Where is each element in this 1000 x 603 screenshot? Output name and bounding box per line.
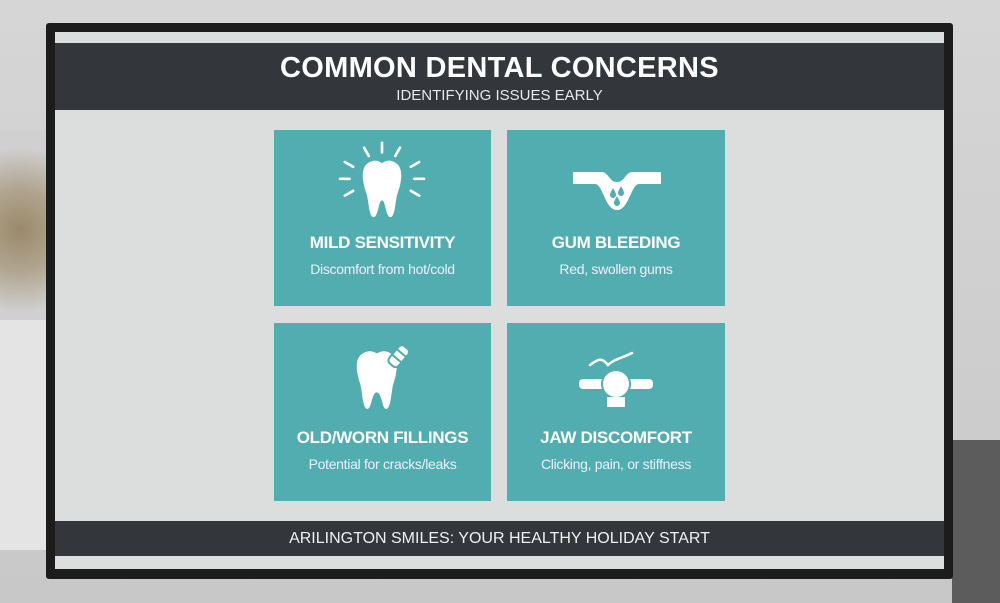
text: Potential for cracks/leaks <box>309 456 456 472</box>
subtitle: IDENTIFYING ISSUES EARLY <box>396 87 603 104</box>
panel: jaw discomfort <box>507 323 725 501</box>
text: Clicking, pain, or stiffness <box>541 456 691 472</box>
heading: MILD SENSITIVITY <box>310 233 455 252</box>
screen <box>55 32 944 569</box>
heading: GUM BLEEDING <box>552 233 680 252</box>
icon: jaw joint <box>579 352 653 407</box>
footer bar <box>55 521 944 556</box>
decoration: right shelf <box>952 440 1000 603</box>
icon: tooth with rays <box>338 142 426 218</box>
title: COMMON DENTAL CONCERNS <box>280 52 719 84</box>
icon: gums with drops <box>573 172 661 210</box>
icon: tooth with filling <box>356 346 408 409</box>
panel: mild sensitivity <box>274 130 491 306</box>
decoration: chair <box>0 320 46 550</box>
heading: JAW DISCOMFORT <box>540 428 692 447</box>
panel: gum bleeding <box>507 130 725 306</box>
decoration: holiday tree <box>0 130 46 330</box>
text: Discomfort from hot/cold <box>310 261 455 277</box>
heading: OLD/WORN FILLINGS <box>297 428 468 447</box>
header bar <box>55 43 944 110</box>
text: Red, swollen gums <box>559 261 673 277</box>
footer bar: ARILINGTON SMILES: YOUR HEALTHY HOLIDAY START <box>289 530 710 547</box>
panel: old/worn fillings <box>274 323 491 501</box>
